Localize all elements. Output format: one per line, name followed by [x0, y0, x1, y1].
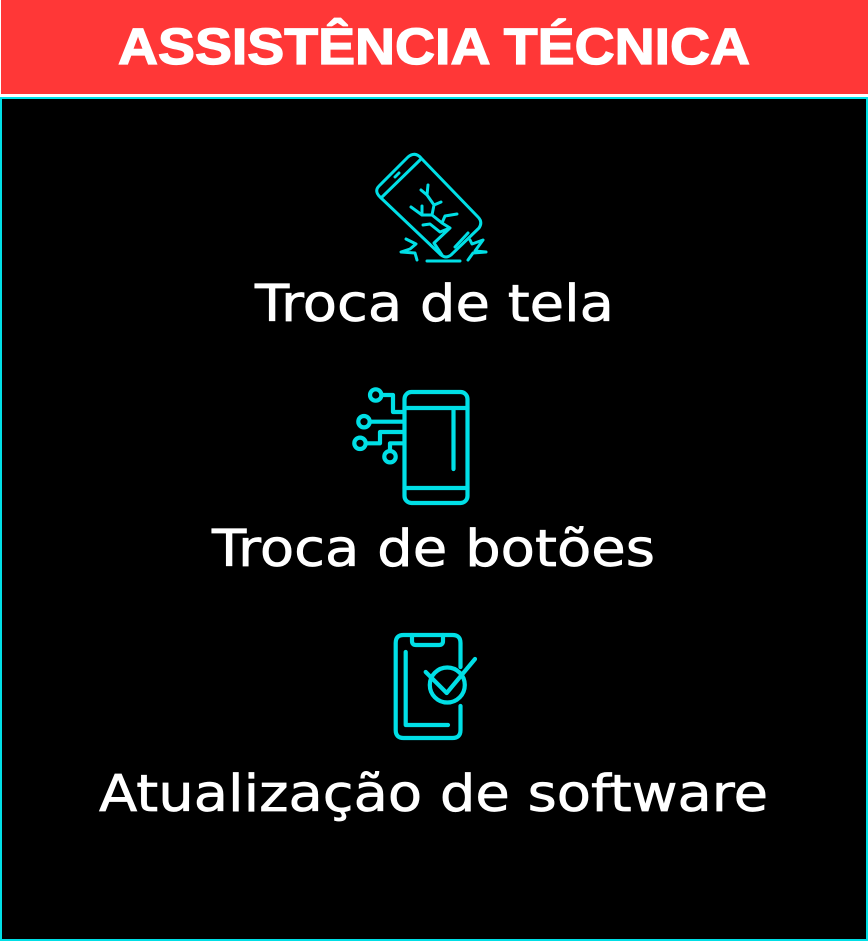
- label: Troca de botões: Troca de botões: [211, 520, 655, 579]
- label: Troca de tela: Troca de tela: [254, 275, 614, 334]
- icon: cracked phone: [377, 154, 486, 261]
- title: ASSISTÊNCIA TÉCNICA: [118, 17, 750, 75]
- icon: phone with circuit: [354, 389, 468, 503]
- label: Atualização de software: Atualização de software: [99, 765, 768, 824]
- icon: phone with check mark: [396, 635, 475, 738]
- header banner: [1, 0, 868, 94]
